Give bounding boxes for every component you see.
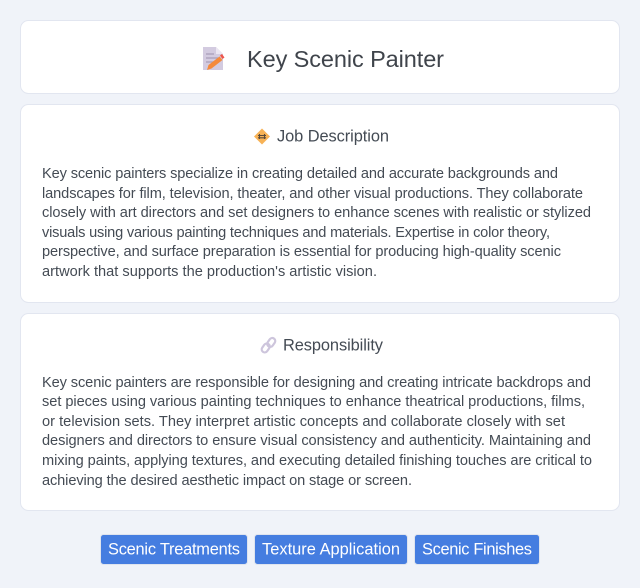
heading: responsibility: Responsibility: [283, 336, 384, 354]
tag: texture application: Texture Application: [262, 540, 400, 558]
text block: job description: closely with art directors and set designers to enhance scenes with realistic or stylized: [42, 205, 591, 221]
tag: texture application: [254, 534, 408, 564]
tag: scenic finishes: [414, 534, 540, 564]
icon: document with pencil: [203, 47, 224, 70]
text block: responsibility: designers and directors to ensure visual consistency and authenticity. Maintaining and: [42, 433, 591, 449]
text block: job description: perspective, and surface preparation is essential for producing high-quality scenic: [42, 244, 561, 260]
text block: job description: artwork that supports the production's artistic vision.: [42, 264, 377, 280]
text block: job description: visuals using various painting techniques and materials. Expertise in color theory,: [42, 225, 550, 241]
text block: responsibility: set pieces using various painting techniques to enhance theatrical productions, films,: [42, 394, 585, 410]
text block: responsibility: mixing paints, applying textures, and executing detailed finishing touches are critical to: [42, 453, 592, 469]
icon: chain link: [261, 337, 276, 354]
tag: scenic treatments: [100, 534, 248, 564]
text block: job description: Key scenic painters specialize in creating detailed and accurate backgrounds and: [42, 166, 558, 182]
heading: job description: Job Description: [277, 128, 389, 146]
text block: job description: landscapes for film, television, theater, and other visual productions. They collaborate: [42, 186, 583, 202]
title: Key Scenic Painter: [247, 46, 444, 72]
tag: scenic finishes: Scenic Finishes: [422, 540, 532, 558]
panel: header: [20, 20, 620, 94]
panel: job description: [20, 104, 620, 302]
text block: responsibility: [42, 375, 592, 489]
icon: road sign: [254, 128, 270, 144]
text block: responsibility: or television sets. They interpret artistic concepts and collaborate closely with set: [42, 414, 565, 430]
panel: responsibility: [20, 314, 620, 510]
text block: responsibility: Key scenic painters are responsible for designing and creating intricate backdrops and: [42, 375, 591, 391]
tag: scenic treatments: Scenic Treatments: [108, 540, 240, 558]
text block: responsibility: achieving the desired aesthetic impact on stage or screen.: [42, 473, 412, 489]
text block: job description: [42, 166, 591, 280]
